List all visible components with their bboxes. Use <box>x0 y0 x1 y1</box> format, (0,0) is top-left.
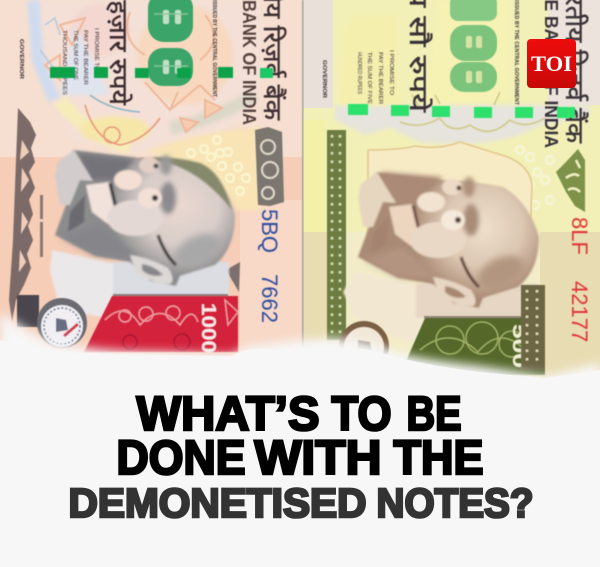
bank name text: THE SUM OF ONE <box>72 30 78 81</box>
bank name text: ISSUED BY THE CENTRAL GOVERNMENT <box>211 0 217 97</box>
green ornamental border <box>327 130 585 340</box>
reserve bank seal <box>37 298 87 348</box>
bank name text: THOUSAND RUPEES <box>61 30 67 96</box>
bank name text: I PROMISE TO <box>388 50 394 95</box>
bank name text: GOVERNOR <box>18 39 24 79</box>
serial number <box>257 209 282 323</box>
title: DEMONETISED <box>68 480 366 526</box>
yellow dotted panel <box>516 146 554 209</box>
yellow dotted panel <box>145 128 262 210</box>
green denomination panel: 500 <box>509 324 529 368</box>
guilloche ornament panel <box>32 0 262 152</box>
bank name text: BANK OF INDIA <box>239 0 259 125</box>
banknote: 1000 rupees <box>0 0 303 380</box>
torn paper edge <box>0 312 600 567</box>
title: BE <box>406 387 462 441</box>
title: TO <box>332 387 392 441</box>
bank name text: ISSUED BY THE CENTRAL GOVERNMENT <box>513 0 519 106</box>
bank name text: GOVERNOR <box>321 60 327 98</box>
bank name text: I PROMISE TO <box>93 28 99 71</box>
title: THE <box>394 431 484 485</box>
bank name text: HUNDRED RUPEES <box>356 52 362 94</box>
serial number: 7662 <box>257 274 282 323</box>
TOI logo <box>527 39 576 88</box>
bank name text: THE SUM OF FIVE <box>366 52 372 105</box>
title: DONE <box>116 431 246 485</box>
red denomination panel <box>84 294 238 353</box>
TOI logo: TOI <box>531 51 572 76</box>
mauve ornamental border <box>9 108 284 327</box>
title: WHAT’S <box>136 387 320 441</box>
serial number <box>567 217 592 342</box>
red denomination panel: 1000 <box>197 303 219 353</box>
bank name text: PAY THE BEARER <box>82 30 88 85</box>
serial number: 42177 <box>567 281 592 342</box>
cream medallion <box>368 142 532 240</box>
reserve bank seal <box>339 321 389 371</box>
large green numerals <box>148 0 193 86</box>
green denomination panel <box>400 285 545 375</box>
serial number: 5BQ <box>257 209 282 253</box>
ornament scrolls <box>400 92 545 131</box>
large green numerals <box>450 0 497 92</box>
banknote: 500 rupees <box>302 0 600 380</box>
bank name text <box>18 0 287 125</box>
green security thread <box>50 67 273 78</box>
pink lotus strokes <box>45 12 222 132</box>
bank name text <box>321 0 589 148</box>
green security thread <box>348 104 575 118</box>
paisley ornament <box>40 18 160 145</box>
title: NOTES? <box>376 480 534 526</box>
serial number: 8LF <box>567 217 592 255</box>
title: WITH <box>254 431 382 485</box>
title <box>68 387 534 526</box>
silver ornament band <box>335 105 590 144</box>
portrait: Gandhi (sepia) <box>343 172 539 342</box>
portrait: Gandhi (grey) <box>50 150 235 320</box>
bank name text: PAY THE BEARER <box>377 52 383 104</box>
